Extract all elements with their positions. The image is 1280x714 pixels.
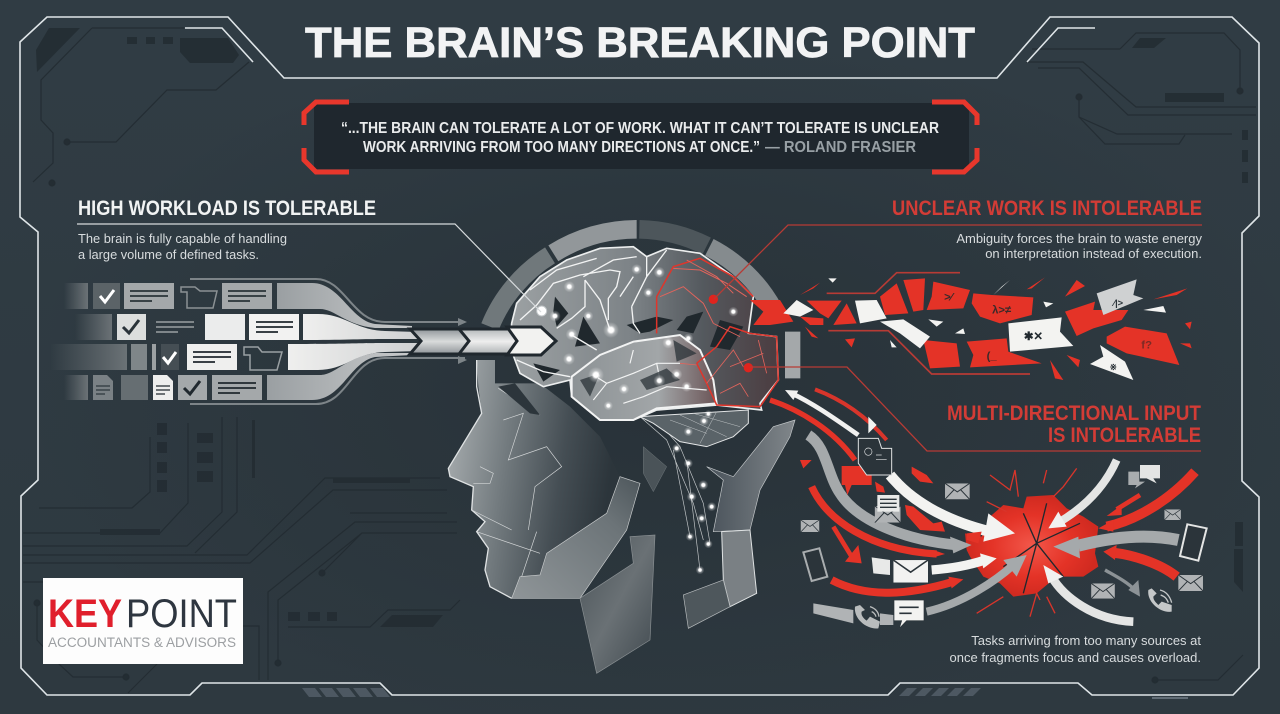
row 2 tasks (75, 314, 418, 340)
left description: a large volume of defined tasks. (78, 247, 259, 262)
white gyri lines (517, 250, 667, 377)
corrupted symbols: ⁄|> (1112, 298, 1124, 308)
row 1 tasks (64, 283, 412, 328)
multi-directional heading: IS INTOLERABLE (1048, 424, 1201, 447)
corrupted symbols: ※ (1110, 362, 1117, 372)
bottom right description: Tasks arriving from too many sources at (971, 633, 1201, 648)
back of neck upper (707, 420, 795, 532)
connector line: workload to brain (77, 224, 541, 312)
red signal lines (827, 273, 1030, 374)
corrupted symbols: f? (1141, 339, 1152, 351)
chat bubble icons (842, 465, 1160, 628)
red burst (965, 468, 1098, 617)
envelope icons (801, 483, 1203, 599)
document icon (858, 438, 892, 475)
quote brackets (304, 102, 977, 172)
right heading: unclear work (892, 197, 1202, 261)
corrupted symbols: (_ (987, 350, 997, 362)
shattered work fragments (750, 273, 1192, 380)
brow shadow (498, 383, 540, 415)
face (448, 360, 620, 598)
cerebellum (640, 410, 748, 447)
red fragments (750, 277, 1192, 380)
right description: Ambiguity forces the brain to waste energy (956, 231, 1202, 246)
corrupted symbols: ✱✕ (1024, 331, 1043, 343)
back of neck middle (722, 530, 757, 607)
connector line: multi-directional to brain (750, 367, 1201, 451)
ear and inner shape (643, 447, 667, 492)
row 4 tasks (64, 353, 412, 400)
quote text: — ROLAND FRASIER (765, 139, 916, 156)
temporal lobe (572, 335, 717, 420)
jaw and cheek (512, 477, 640, 598)
task stream (50, 279, 467, 404)
white fragments (783, 278, 1166, 380)
arrows from right (1052, 460, 1195, 622)
corrupted symbols (944, 292, 1152, 372)
logo wordmark: KEY (48, 592, 122, 636)
arrowheads right (1043, 505, 1140, 597)
white entry node (537, 306, 547, 316)
logo tagline: ACCOUNTANTS & ADVISORS (48, 635, 236, 650)
phone icons (803, 524, 1207, 629)
right description: on interpretation instead of execution. (985, 246, 1202, 261)
corrupted symbols: >⁄ (944, 292, 955, 304)
gray banner (1097, 279, 1143, 315)
converging input arrows (770, 389, 1207, 629)
bottom right description: once fragments focus and causes overload. (950, 650, 1201, 665)
temporal lobe folds (593, 350, 707, 403)
facial detail lines (472, 388, 562, 577)
glowing nodes (549, 264, 738, 410)
left description: The brain is fully capable of handling (78, 231, 287, 246)
gray band pieces (813, 603, 893, 625)
head illustration (448, 229, 795, 673)
red nodes (709, 295, 753, 372)
small red pieces (800, 460, 982, 543)
red affected lobe lines (657, 258, 778, 407)
arrowheads left (785, 390, 1027, 588)
multi-directional heading (947, 402, 1201, 447)
bottom stripe accents (302, 688, 1188, 699)
merged chevron arrow (410, 327, 556, 355)
right heading: unclear work: UNCLEAR WORK IS INTOLERABLE (892, 197, 1202, 220)
quote panel (304, 102, 977, 172)
face outline (448, 360, 512, 598)
neck (580, 535, 655, 673)
stream outline (190, 279, 465, 404)
quote text: “...THE BRAIN CAN TOLERATE A LOT OF WORK. WHAT IT CAN’T TOLERATE IS UNCLEAR (341, 120, 939, 137)
brain stem fibres (640, 417, 710, 570)
burst cracks (977, 468, 1077, 617)
arrows from left (770, 389, 1013, 612)
brain illustration (510, 247, 778, 420)
quote text: WORK ARRIVING FROM TOO MANY DIRECTIONS AT ONCE.” (363, 139, 760, 156)
left heading: high workload (78, 197, 376, 262)
row 3 tasks (50, 343, 418, 370)
dark sulci (533, 297, 743, 382)
corrupted symbols: λ>≠ (992, 304, 1012, 316)
upper brain (510, 247, 778, 420)
spine nodes (672, 410, 716, 574)
multi-directional heading: MULTI-DIRECTIONAL INPUT (947, 402, 1201, 425)
logo panel: keypoint (43, 578, 243, 664)
logo wordmark: POINT (126, 592, 237, 636)
connector line: unclear work to brain (714, 225, 1202, 299)
back of neck lower (683, 580, 730, 628)
left heading: high workload: HIGH WORKLOAD IS TOLERABLE (78, 197, 376, 220)
helmet ring segments (490, 229, 793, 378)
title: THE BRAIN’S BREAKING POINT (305, 19, 975, 67)
